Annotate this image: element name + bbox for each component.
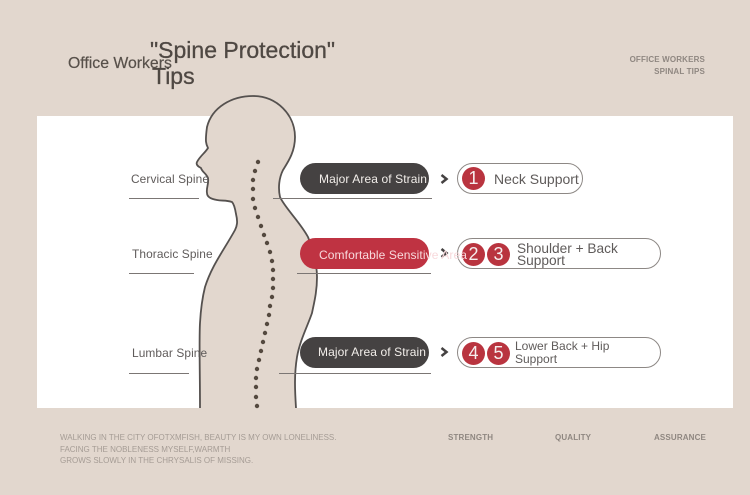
support 2 text: Shoulder + Back [517,241,618,256]
support 1: neck [457,163,583,194]
footer paragraph: FACING THE NOBLENESS MYSELF,WARMTH [60,444,230,454]
label: cervical spine: Cervical Spine [131,172,209,186]
support 3: lower back and hip [457,337,661,368]
number 5 [487,342,510,365]
number 4 [462,342,485,365]
top-right caption: OFFICE WORKERS [630,55,705,64]
white panel [37,116,733,408]
pill: major area of strain (neck) [300,163,429,194]
support 2 text [517,241,618,268]
pill text: Major Area of Strain [319,172,427,186]
footer paragraph [60,433,336,465]
footer paragraph: WALKING IN THE CITY OFOTXMFISH, BEAUTY IS MY OWN LONELINESS. [60,433,336,442]
number 1: 1 [468,168,478,188]
number 4: 4 [468,343,478,363]
label: thoracic spine: Thoracic Spine [132,247,213,261]
support 3 text: Support [515,352,557,366]
title: Tips [152,63,195,89]
number 2: 2 [468,244,478,264]
footer: quality: QUALITY [555,433,591,442]
title: "Spine Protection" [150,37,335,63]
support 2: shoulder and back [457,238,661,269]
pill: comfortable sensitive area [300,238,429,269]
number 2 [462,243,485,266]
top-right caption: SPINAL TIPS [654,66,705,76]
support 1 text: Neck Support [494,171,579,187]
support 2 text: Support [517,253,565,268]
support 3 text: Lower Back + Hip [515,339,609,353]
footer: strength: STRENGTH [448,433,493,442]
number 5: 5 [493,343,504,363]
title [150,37,335,90]
pill: major area of strain (lumbar) [300,337,429,368]
pill text: Major Area of Strain [318,345,426,359]
number 3 [487,243,510,266]
number 1 [462,167,485,190]
top-right caption [630,55,705,76]
subtitle: Office Workers: Office Workers [68,55,172,72]
support 3 text [515,339,609,366]
label: lumbar spine: Lumbar Spine [132,346,207,360]
number 3: 3 [493,244,504,264]
footer: assurance: ASSURANCE [654,433,706,442]
pill text overflowing across the outline pill: Comfortable Sensitive Area [319,248,467,262]
footer paragraph: GROWS SLOWLY IN THE CHRYSALIS OF MISSING. [60,456,253,465]
